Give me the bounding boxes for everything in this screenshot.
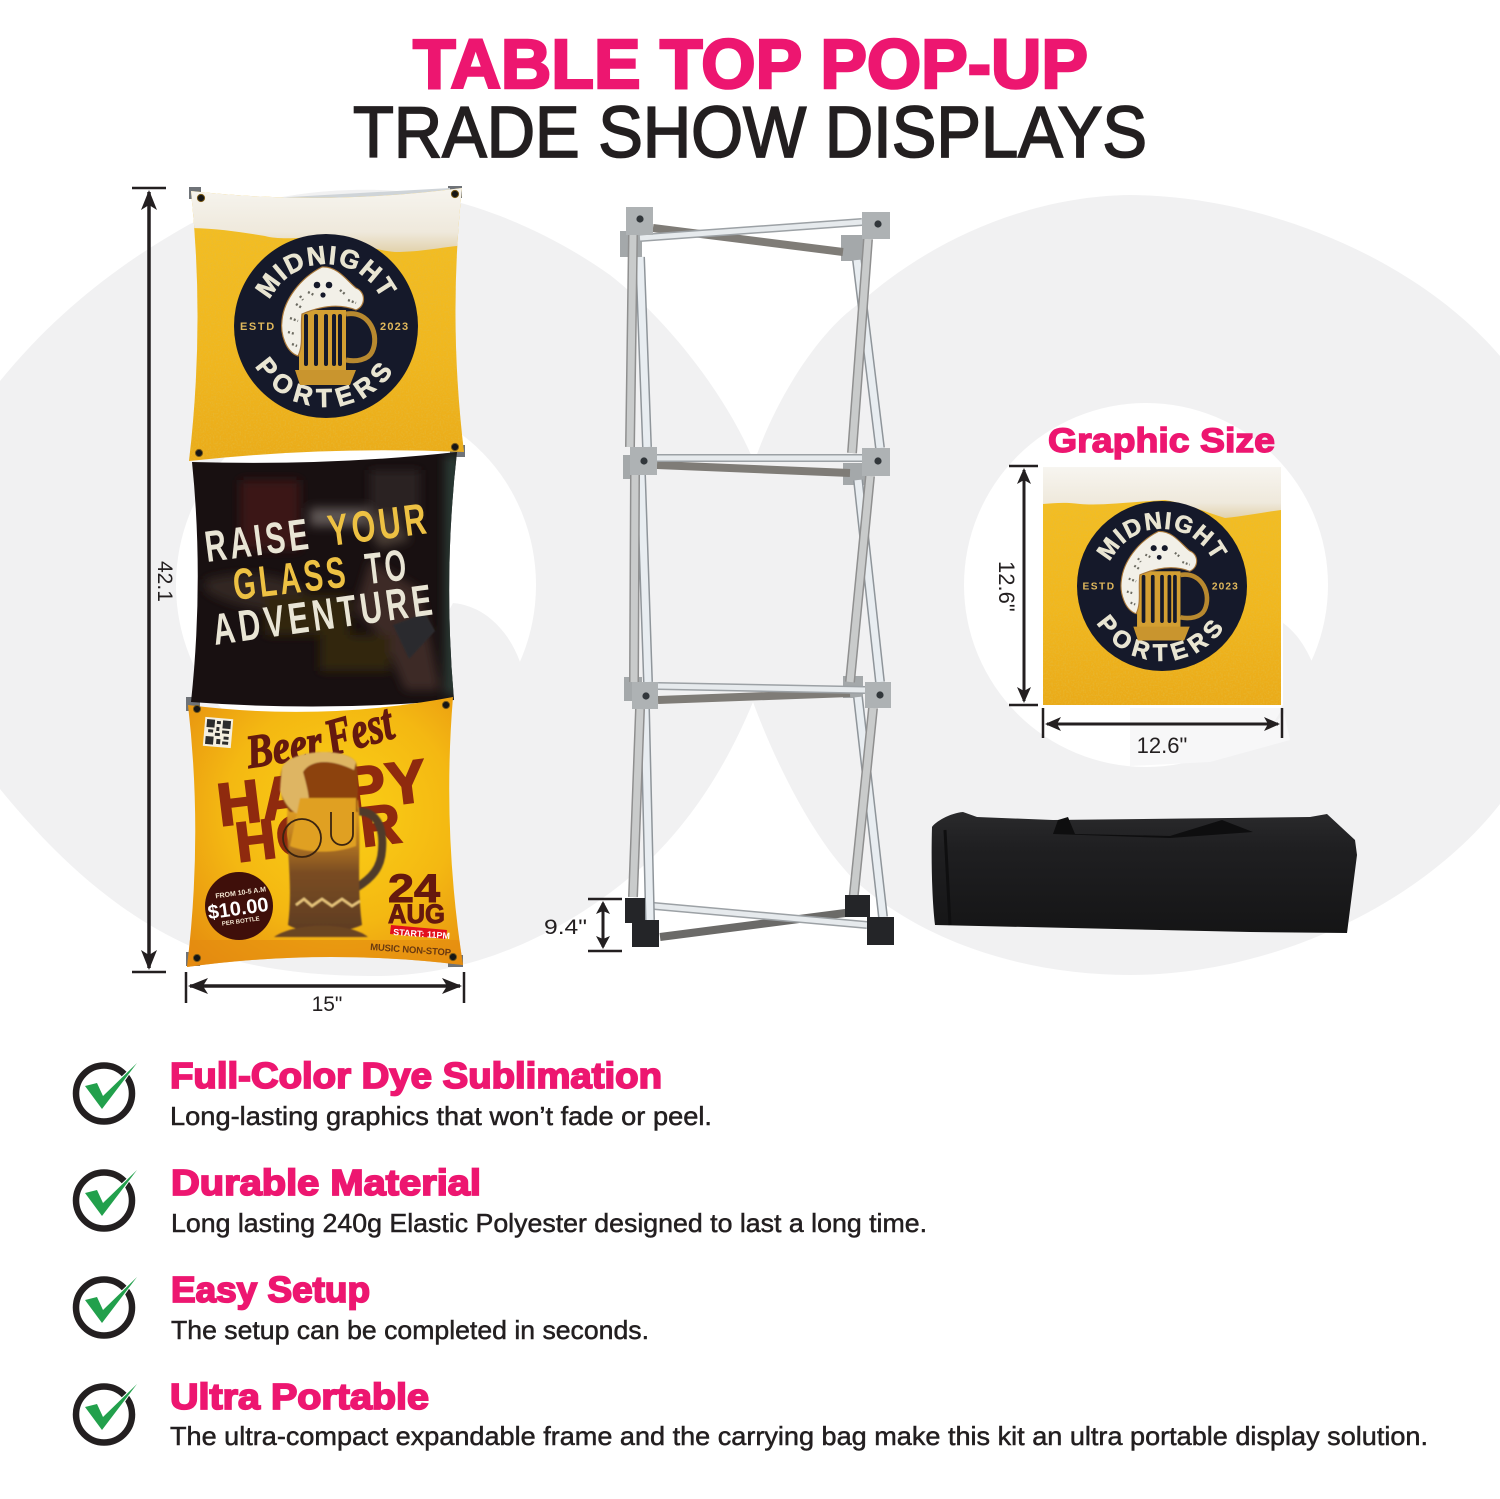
carrying bag [932, 812, 1357, 933]
dimension: depth 9.4 [544, 899, 622, 951]
logo: Midnight Porters: MIDNIGHT [254, 246, 398, 299]
date block: START: 11PM [393, 927, 450, 941]
icon: check mark [76, 1060, 139, 1122]
pop-up frame [620, 207, 894, 947]
scissor posts [640, 257, 883, 920]
feature: Durable Material [76, 1162, 927, 1238]
heading: Beer Fest [242, 694, 401, 779]
banner display: three stacked graphics [186, 186, 465, 967]
dark cross bars [653, 228, 850, 700]
graphic panel: Beer Fest Happy Hour [180, 695, 470, 975]
dimension: graphic width 12.6 [1043, 708, 1282, 758]
logo: Midnight Porters: PORTERS [1096, 614, 1222, 662]
heading: Graphic Size: Graphic Size [1048, 422, 1275, 460]
heading: Happy Hour: HAPPY [213, 747, 430, 839]
grommets [193, 190, 459, 962]
heading: Happy Hour: HOUR [232, 791, 404, 874]
logo: Midnight Porters: ESTD [240, 321, 276, 333]
price badge: FROM 10-5 A.M [215, 886, 267, 900]
frame corners behind top banner [186, 186, 465, 967]
logo: Midnight Porters [1077, 501, 1247, 671]
heading: Full-Color Dye Sublimation [170, 1055, 662, 1096]
QR code [203, 717, 233, 748]
title [353, 25, 1147, 173]
black foot blocks [625, 895, 894, 947]
slogan: raise your glass to adventure: GLASS [230, 548, 351, 610]
slogan: raise your glass to adventure: RAISE [202, 510, 314, 572]
frame tube top [200, 190, 450, 204]
heading: Beer Fest: Beer [242, 716, 326, 779]
feature: Ultra Portable [76, 1376, 1428, 1451]
price badge [205, 872, 273, 940]
date block: 24 [388, 867, 441, 911]
title line 2: TRADE SHOW DISPLAYS [353, 93, 1147, 173]
date block: AUG [388, 899, 445, 929]
graphic panel: Raise your glass [185, 450, 465, 715]
icon: check mark [76, 1274, 139, 1336]
dimension: graphic height 12.6 [994, 466, 1038, 705]
dimension: depth 9.4: 9.4" [544, 916, 587, 939]
slogan: raise your glass to adventure: ADVENTURE [210, 575, 439, 655]
slogan: raise your glass to adventure: TO [362, 540, 412, 594]
mug icon [1121, 531, 1207, 641]
description: Long lasting 240g Elastic Polyester designed to last a long time. [171, 1208, 927, 1238]
blurred pub photo [205, 455, 460, 695]
logo: Midnight Porters [234, 234, 418, 418]
icon: check mark [76, 1167, 139, 1228]
mug icon [282, 267, 375, 385]
feature: Easy Setup [76, 1269, 649, 1345]
logo: Midnight Porters: MIDNIGHT [1096, 512, 1228, 561]
description: The ultra-compact expandable frame and the carrying bag make this kit an ultra portable display solution. [170, 1421, 1428, 1451]
date block [370, 867, 452, 959]
logo: Midnight Porters: 2023 [380, 321, 409, 333]
date block: MUSIC NON-STOP [370, 942, 452, 959]
graphic size panel [994, 422, 1284, 758]
outlined letters on mug [283, 812, 353, 857]
graphic artwork [1043, 467, 1281, 705]
dimension: graphic height 12.6: 12.6" [994, 561, 1019, 612]
logo: Midnight Porters: PORTERS [255, 356, 391, 408]
price badge: $10.00 [206, 894, 270, 924]
description: Long-lasting graphics that won’t fade or peel. [170, 1101, 712, 1131]
beer mug photo [274, 752, 382, 937]
description: The setup can be completed in seconds. [171, 1315, 649, 1345]
icon: check mark [76, 1381, 139, 1442]
light cross bars [640, 222, 867, 925]
background: grey double-circle shape [0, 190, 1500, 976]
heading: Ultra Portable [170, 1376, 429, 1417]
heading: Beer Fest: Fest [318, 694, 401, 768]
slogan: raise your glass to adventure: YOUR [325, 494, 432, 556]
back plates [620, 231, 865, 701]
heading: Durable Material [171, 1162, 481, 1203]
dimension: width 15 [186, 972, 464, 1016]
graphic panel: Midnight Porters [185, 185, 470, 470]
dimension: graphic width 12.6: 12.6" [1137, 733, 1187, 758]
title line 1: TABLE TOP POP-UP [413, 25, 1088, 103]
logo: Midnight Porters: ESTD [1083, 582, 1116, 593]
slogan: raise your glass to adventure [202, 494, 439, 655]
logo: Midnight Porters: 2023 [1212, 582, 1239, 593]
features list [76, 1055, 1428, 1451]
heading: Easy Setup [171, 1269, 370, 1310]
dimension: height 42.1 [132, 188, 176, 972]
connector plates [626, 207, 891, 709]
dimension: width 15: 15" [312, 993, 342, 1016]
price badge: PER BOTTLE [222, 916, 260, 928]
feature: Full-Color Dye Sublimation [76, 1055, 712, 1131]
bag handle [1053, 817, 1253, 838]
dimension: height 42.1: 42.1 [153, 561, 176, 602]
